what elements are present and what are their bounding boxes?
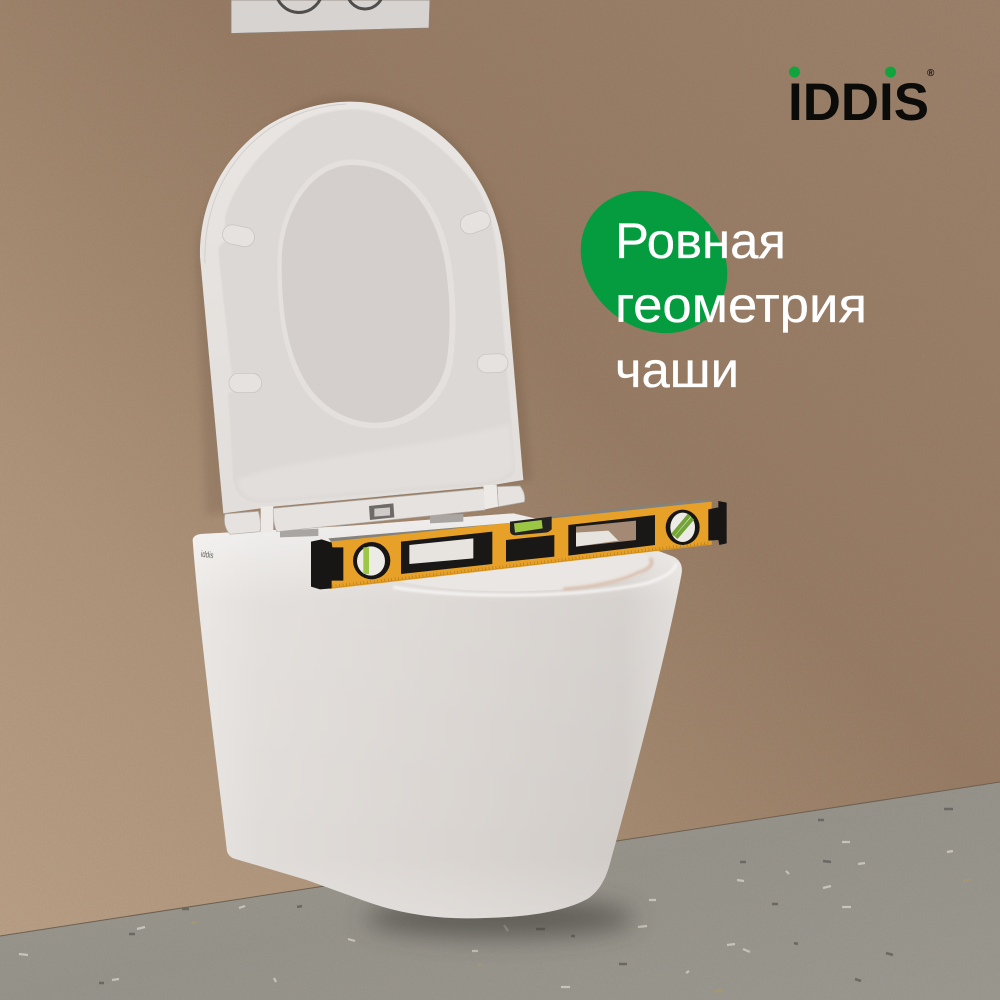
heading [615,213,867,398]
bowl opening [393,543,650,591]
floor terrazzo specks: tan [191,880,971,991]
floor terrazzo specks: light [19,842,953,987]
spirit level [311,499,727,589]
heading: геометрия [615,277,867,333]
seat ring [277,159,456,428]
heading: Ровная [615,213,786,269]
right handle window [568,515,655,556]
hinge release button [369,503,394,520]
level top grey strip [328,499,711,542]
hinge pads [280,514,463,537]
flush button small [347,0,383,9]
floor terrazzo specks: dark [99,809,953,983]
toilet bowl [193,513,682,918]
level left end cap [311,539,343,589]
centre black label [506,535,554,562]
registered mark: ® [927,68,935,79]
logo green dot left [789,66,800,78]
bowl brand mark: iddis [200,549,215,560]
top vial [510,517,552,535]
green blob accent [552,161,756,363]
logo green dot right [885,66,896,78]
seat lower highlight [237,423,514,501]
rim highlight [393,563,677,595]
flush button large [276,0,322,12]
seat hinge bar [224,485,525,534]
seat shadow on wall [196,96,532,515]
heading: чаши [615,342,739,398]
seat bumper top right [458,208,493,237]
right vial [666,510,700,545]
IDDIS logo: IDDIS [788,73,929,132]
seat opening [282,165,450,423]
left handle window [401,532,492,574]
floor [0,782,1000,1000]
seat bumper bottom right [477,353,508,373]
level right end cap [708,501,727,545]
seat bumper bottom left [229,373,262,393]
shadow under bowl [365,898,635,938]
rim reflection [563,558,652,589]
level ruler ticks [332,543,708,586]
seat bumper top left [221,223,256,249]
toilet seat [200,102,525,537]
seat outer shell [200,102,523,513]
seat recessed panel [218,109,515,503]
level yellow body [330,502,712,589]
flush plate [231,0,430,34]
left vial [353,542,390,579]
